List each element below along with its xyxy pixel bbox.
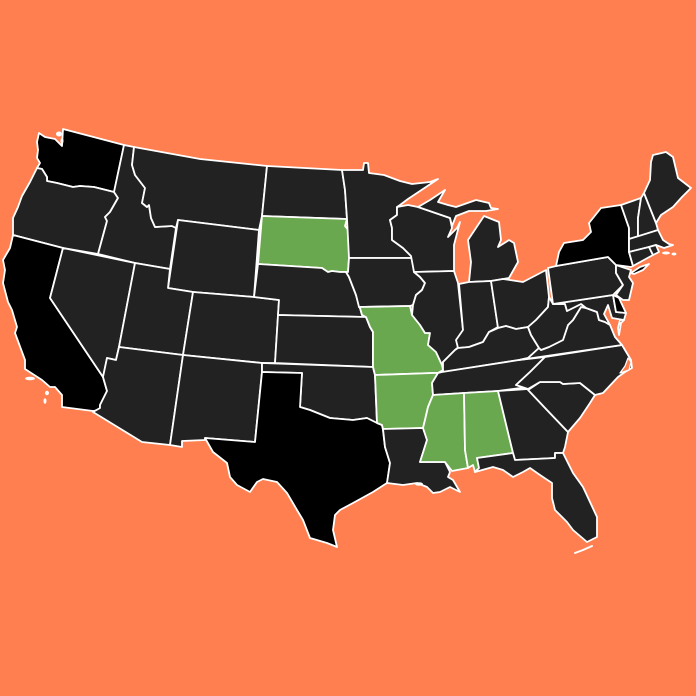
state: Vermont: [621, 198, 641, 239]
state: Nebraska: [254, 264, 366, 317]
state: Mississippi (highlighted): [420, 393, 468, 471]
state: Louisiana: [383, 428, 460, 493]
state: Indiana: [456, 281, 498, 348]
islands: Cape Cod and Nantucket: [662, 252, 676, 256]
state: Utah: [119, 263, 193, 355]
state: Nevada: [50, 248, 135, 377]
state: South Dakota (highlighted): [258, 216, 350, 272]
state: Kentucky: [443, 326, 539, 372]
state: North Carolina: [516, 345, 632, 395]
state: Pennsylvania: [548, 257, 623, 304]
state: Massachusetts: [629, 230, 673, 252]
state: Michigan lower peninsula: [468, 216, 518, 282]
state: Virginia: [519, 307, 622, 360]
islands: Channel Islands: [25, 377, 49, 404]
state: Michigan upper peninsula: [418, 190, 498, 226]
state: Iowa: [346, 258, 425, 307]
state: Maine: [644, 152, 691, 223]
state: Idaho: [98, 145, 176, 269]
state: Kansas: [275, 315, 373, 367]
state: Connecticut: [629, 247, 653, 266]
state: New York: [556, 205, 633, 267]
state: Maryland: [553, 295, 626, 325]
state: Washington: [37, 129, 124, 192]
state: Delaware: [613, 295, 626, 313]
state: Virginia eastern shore: [618, 320, 624, 335]
state: Arizona: [93, 347, 183, 445]
state: Texas: [205, 372, 390, 547]
state: Arkansas (highlighted): [375, 373, 438, 429]
state: Minnesota: [342, 163, 438, 258]
state: Missouri (highlighted): [359, 306, 443, 375]
state: Rhode Island: [649, 245, 659, 255]
state: South Carolina: [528, 382, 595, 432]
state: Wisconsin: [390, 205, 460, 272]
state: North Dakota: [262, 166, 347, 219]
state: New Jersey: [616, 265, 633, 300]
state: Montana: [132, 147, 267, 230]
state: Georgia: [498, 389, 568, 460]
state: West Virginia: [528, 297, 586, 350]
state: California: [3, 235, 107, 411]
state: Wyoming: [168, 220, 259, 297]
islands: Puget Sound: [56, 132, 64, 144]
state: Illinois: [412, 271, 463, 365]
state: Oregon: [13, 168, 118, 254]
state: Florida: [475, 453, 597, 542]
state: Colorado: [183, 292, 279, 363]
state: Alabama (highlighted): [464, 391, 513, 472]
islands: Florida Keys: [575, 546, 592, 553]
state: New York, Long Island: [631, 264, 649, 274]
water: Pamlico Sound: [620, 358, 631, 373]
state: Tennessee: [432, 357, 545, 395]
state: Ohio: [491, 270, 549, 329]
state: New Hampshire: [638, 193, 658, 237]
state: Oklahoma: [262, 363, 377, 423]
islands: Louisiana coast: [415, 482, 423, 486]
state: New Mexico: [170, 355, 262, 447]
